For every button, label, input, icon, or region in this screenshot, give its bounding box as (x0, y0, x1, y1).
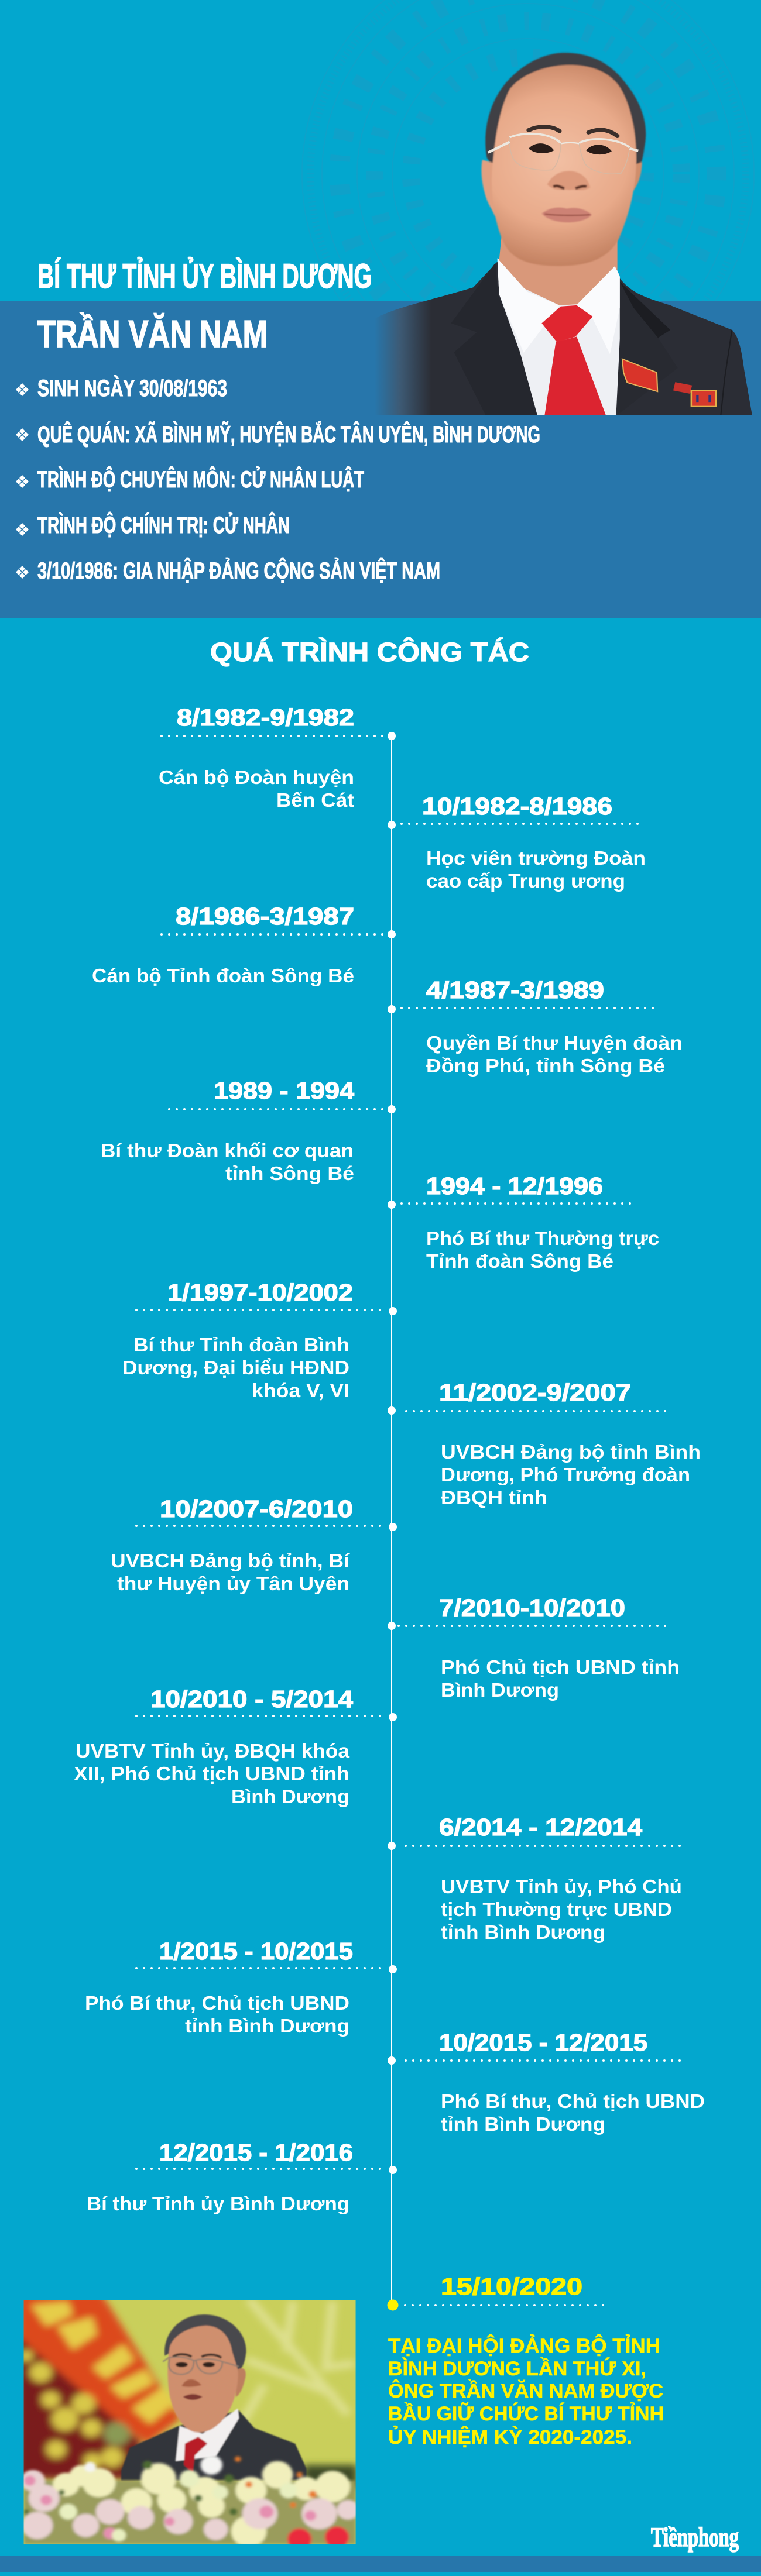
timeline item 3: Cán bộ Tỉnh đoàn Sông Bé (92, 965, 354, 986)
section heading: QUÁ TRÌNH CÔNG TÁC (210, 637, 529, 667)
bullet: political qualification (16, 511, 290, 538)
hair (485, 53, 646, 176)
timeline item 8: UVBCH Đảng bộ tỉnh Bình (441, 1441, 701, 1463)
final callout text (388, 2334, 664, 2448)
timeline item 8: 11/2002-9/2007 (439, 1379, 631, 1406)
timeline item 12: 6/2014 - 12/2014 (439, 1814, 642, 1841)
timeline item 12 (388, 1814, 682, 1943)
timeline item 10: Bình Dương (441, 1679, 559, 1701)
bullet: party admission: 3/10/1986: GIA NHẬP ĐẢNG CỘNG SẢN VIỆT NAM (37, 557, 440, 584)
timeline item 1: Bến Cát (276, 789, 354, 811)
timeline item 4 (388, 976, 683, 1077)
timeline item 13: tỉnh Bình Dương (185, 2015, 349, 2037)
heading: name: TRẦN VĂN NAM (37, 312, 268, 355)
timeline item 11: 10/2010 - 5/2014 (150, 1686, 353, 1712)
timeline item 5 (101, 1077, 396, 1184)
timeline item 8: ĐBQH tỉnh (441, 1487, 547, 1508)
timeline item 8: Dương, Phó Trưởng đoàn (441, 1464, 690, 1485)
jacket lapels (451, 263, 732, 415)
timeline item 12: tỉnh Bình Dương (441, 1921, 605, 1943)
timeline item 8 (388, 1379, 701, 1508)
timeline item 3 (92, 903, 396, 986)
timeline spine (391, 736, 392, 2304)
party flag pin (622, 359, 657, 391)
head (481, 53, 646, 266)
bullet list: personal details (16, 375, 540, 584)
final callout text: BẦU GIỮ CHỨC BÍ THƯ TỈNH (388, 2403, 664, 2425)
shirt (498, 258, 620, 415)
bullet: home town (16, 421, 540, 448)
face (492, 65, 636, 266)
timeline item 10: 7/2010-10/2010 (439, 1594, 625, 1621)
mouth (541, 208, 592, 222)
timeline item 10: Phó Chủ tịch UBND tỉnh (441, 1656, 680, 1678)
header watermark: bronze drum pattern (301, 0, 755, 301)
timeline item 15 (87, 2139, 397, 2214)
timeline item 6: 1994 - 12/1996 (426, 1172, 603, 1199)
speaker (121, 2314, 307, 2481)
shirt collars (498, 258, 620, 354)
timeline item 11 (74, 1686, 397, 1807)
timeline item 4: 4/1987-3/1989 (426, 976, 604, 1003)
portrait photo: Trần Văn Nam (375, 53, 752, 415)
timeline item 1: Cán bộ Đoàn huyện (159, 766, 354, 788)
blurred backdrop (18, 2293, 357, 2488)
timeline final item: 15/10/2020 (388, 2273, 606, 2311)
final callout text: TẠI ĐẠI HỘI ĐẢNG BỘ TỈNH (388, 2334, 660, 2357)
timeline item 14: Phó Bí thư, Chủ tịch UBND (441, 2090, 705, 2112)
timeline item 13 (85, 1938, 397, 2037)
timeline item 11: Bình Dương (231, 1786, 349, 1807)
timeline item 1 (159, 704, 396, 811)
eyebrows (529, 127, 618, 136)
ribbon badges (673, 382, 716, 407)
timeline item 6: Phó Bí thư Thường trực (426, 1227, 659, 1249)
bullet: political qualification: TRÌNH ĐỘ CHÍNH TRỊ: CỬ NHÂN (37, 511, 290, 538)
footer band (0, 2556, 761, 2572)
heading: title: BÍ THƯ TỈNH ỦY BÌNH DƯƠNG (37, 257, 372, 295)
timeline item 6: Tỉnh đoàn Sông Bé (426, 1250, 613, 1272)
timeline item 2: 10/1982-8/1986 (422, 793, 612, 820)
timeline item 9: 10/2007-6/2010 (160, 1495, 353, 1522)
timeline item 4: Đồng Phú, tỉnh Sông Bé (426, 1055, 665, 1077)
timeline item 4: Quyền Bí thư Huyện đoàn (426, 1032, 683, 1054)
congress photo (18, 2293, 359, 2550)
timeline item 5: Bí thư Đoàn khối cơ quan (101, 1140, 354, 1161)
timeline item 2: cao cấp Trung ương (426, 870, 625, 892)
timeline item 7: khóa V, VI (252, 1380, 349, 1401)
timeline item 13: Phó Bí thư, Chủ tịch UBND (85, 1992, 349, 2014)
glasses (488, 134, 638, 174)
neck (499, 236, 618, 305)
timeline item 5: 1989 - 1994 (214, 1077, 354, 1104)
timeline item 6 (388, 1172, 659, 1272)
timeline item 5: tỉnh Sông Bé (225, 1163, 354, 1184)
timeline item 3: 8/1986-3/1987 (176, 903, 354, 930)
timeline item 7 (122, 1279, 397, 1401)
timeline item 1: 8/1982-9/1982 (177, 704, 354, 731)
bullet: birth date (16, 375, 227, 401)
timeline item 14 (388, 2029, 705, 2135)
eyes (529, 143, 612, 154)
bullet: professional qualification: TRÌNH ĐỘ CHUYÊN MÔN: CỬ NHÂN LUẬT (37, 466, 364, 493)
nose (547, 171, 590, 190)
timeline item 11: UVBTV Tỉnh ủy, ĐBQH khóa (76, 1740, 350, 1762)
timeline item 11: XII, Phó Chủ tịch UBND tỉnh (74, 1763, 349, 1784)
bullet: home town: QUÊ QUÁN: XÃ BÌNH MỸ, HUYỆN BẮC TÂN UYÊN, BÌNH DƯƠNG (37, 421, 540, 448)
final callout text: ÔNG TRẦN VĂN NAM ĐƯỢC (388, 2379, 663, 2402)
timeline item 15: 12/2015 - 1/2016 (159, 2139, 353, 2166)
timeline item 13: 1/2015 - 10/2015 (159, 1938, 353, 1965)
blue info panel (0, 301, 761, 618)
timeline final item: 15/10/2020: 15/10/2020 (441, 2273, 582, 2300)
bullet: professional qualification (16, 466, 364, 493)
ears (481, 160, 501, 227)
timeline item 12: UVBTV Tỉnh ủy, Phó Chủ (441, 1876, 682, 1897)
bullet: birth date: SINH NGÀY 30/08/1963 (37, 375, 227, 401)
timeline item 9: thư Huyện ủy Tân Uyên (117, 1573, 349, 1594)
final callout text: ỦY NHIỆM KỲ 2020-2025. (388, 2426, 632, 2448)
timeline item 9: UVBCH Đảng bộ tỉnh, Bí (111, 1550, 351, 1571)
timeline item 7: Dương, Đại biểu HĐND (122, 1357, 349, 1378)
timeline item 2 (388, 793, 646, 892)
timeline item 12: tịch Thường trực UBND (441, 1899, 672, 1920)
timeline item 9 (111, 1495, 397, 1594)
tie (541, 305, 606, 415)
timeline item 15: Bí thư Tỉnh ủy Bình Dương (87, 2193, 349, 2214)
timeline item 7: Bí thư Tỉnh đoàn Bình (133, 1334, 349, 1356)
timeline item 14: tỉnh Bình Dương (441, 2113, 605, 2135)
bullet: party admission (16, 557, 440, 584)
timeline item 14: 10/2015 - 12/2015 (439, 2029, 647, 2056)
flower arrangement (21, 2455, 359, 2550)
timeline item 2: Học viên trường Đoàn (426, 847, 646, 869)
final callout text: BÌNH DƯƠNG LẦN THỨ XI, (388, 2358, 646, 2380)
timeline item 10 (388, 1594, 680, 1701)
jacket (375, 262, 752, 415)
timeline item 7: 1/1997-10/2002 (167, 1279, 353, 1306)
